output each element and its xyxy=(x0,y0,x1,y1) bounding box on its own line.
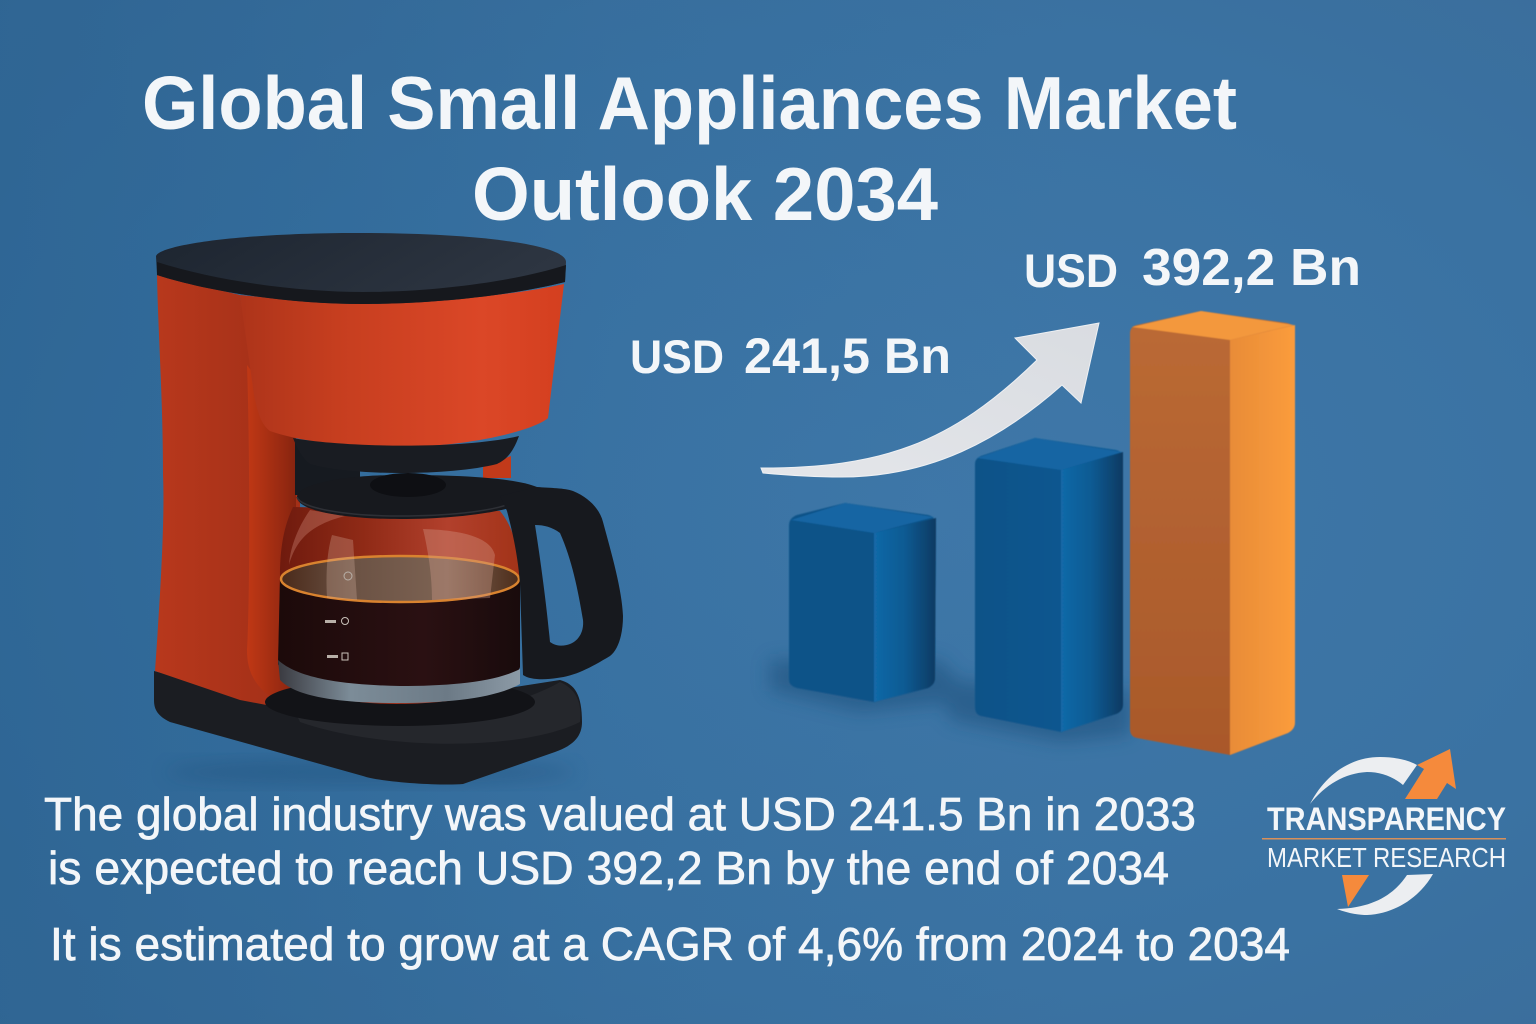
description text: It is estimated to grow at a CAGR of 4,6% from 2024 to 2034 xyxy=(50,918,1290,970)
description text xyxy=(44,788,1290,970)
red strip behind carafe xyxy=(483,456,511,478)
carafe glass xyxy=(278,507,520,704)
water tank xyxy=(240,284,564,447)
value label: 2033 xyxy=(630,328,951,384)
value label: 2034: USD xyxy=(1024,244,1118,297)
bar 3 xyxy=(1130,311,1295,755)
logo orange triangle xyxy=(1342,875,1369,907)
title xyxy=(142,61,1237,236)
coffee maker shadow xyxy=(165,760,575,784)
lid xyxy=(156,233,566,304)
coffee surface xyxy=(281,556,519,602)
metal band xyxy=(278,660,520,703)
arrow xyxy=(761,323,1099,477)
logo name: TRANSPARENCY xyxy=(1267,801,1506,837)
logo top arc xyxy=(1310,757,1417,804)
logo orange arrow xyxy=(1405,749,1456,799)
bar 2 xyxy=(975,438,1123,732)
bar chart xyxy=(770,311,1295,755)
coffee xyxy=(278,578,520,700)
description text: is expected to reach USD 392,2 Bn by the end of 2034 xyxy=(48,842,1169,894)
bar shadows xyxy=(770,660,1130,742)
carafe plate xyxy=(265,678,535,726)
base xyxy=(154,671,582,785)
title: Outlook 2034 xyxy=(472,152,938,236)
measure marks xyxy=(325,572,352,660)
carafe lid xyxy=(297,475,537,519)
glass highlights xyxy=(423,529,495,600)
value label: 2033: 241,5 Bn xyxy=(744,328,951,384)
bar 1 xyxy=(789,503,936,702)
body column xyxy=(155,275,345,720)
base top plate xyxy=(285,682,580,744)
body channel xyxy=(247,365,320,718)
carafe knob xyxy=(370,473,446,497)
logo: Transparency Market Research xyxy=(1262,749,1506,915)
description text: The global industry was valued at USD 241.5 Bn in 2033 xyxy=(44,788,1196,840)
inner dark recess xyxy=(295,440,360,495)
title: Global Small Appliances Market xyxy=(142,61,1237,145)
value label: 2033: USD xyxy=(630,330,724,383)
value label: 2034: 392,2 Bn xyxy=(1142,239,1361,297)
logo bottom arc xyxy=(1337,874,1433,915)
value label: 2034 xyxy=(1024,239,1361,297)
handle xyxy=(500,487,623,679)
filter holder xyxy=(293,436,519,473)
icon: coffee maker xyxy=(154,233,623,785)
